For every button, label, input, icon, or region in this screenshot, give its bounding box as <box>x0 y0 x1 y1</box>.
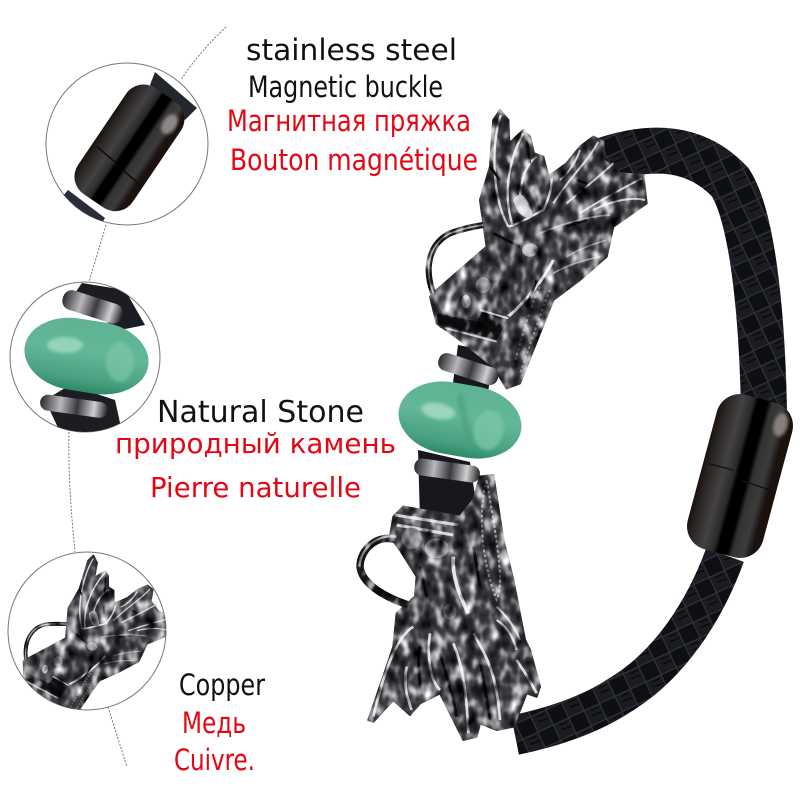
inset: magnetic buckle <box>46 63 208 230</box>
label: stainless steel magnetic buckle: stainless steel <box>246 33 457 67</box>
label: stainless steel magnetic buckle: Bouton magnétique <box>230 143 478 177</box>
magnetic clasp <box>682 389 798 563</box>
bracelet <box>359 110 798 740</box>
label: stainless steel magnetic buckle: Магнитная пряжка <box>227 104 471 138</box>
label: copper <box>174 668 265 777</box>
metal ring upper <box>436 351 501 387</box>
green stone bead <box>393 374 527 466</box>
label: natural stone: Pierre naturelle <box>150 471 361 504</box>
dotted leader lines <box>69 27 226 767</box>
braided leather band, lower <box>515 555 725 735</box>
inset: copper dragon head <box>8 552 166 710</box>
label: natural stone: Natural Stone <box>157 395 364 430</box>
label: copper: Медь <box>182 706 246 740</box>
inset: natural stone <box>10 282 160 432</box>
upper dragon head <box>429 110 647 388</box>
leather between stone and heads <box>418 345 495 530</box>
lower dragon head <box>359 475 540 740</box>
label: natural stone: природный камень <box>115 427 396 460</box>
label: copper: Copper <box>179 668 265 702</box>
label: stainless steel magnetic buckle <box>227 33 478 177</box>
label: natural stone <box>115 395 396 504</box>
metal ring lower <box>413 457 481 484</box>
braided leather band, upper <box>605 151 764 410</box>
label: copper: Cuivre. <box>174 743 255 777</box>
label: stainless steel magnetic buckle: Magnetic buckle <box>248 70 443 104</box>
